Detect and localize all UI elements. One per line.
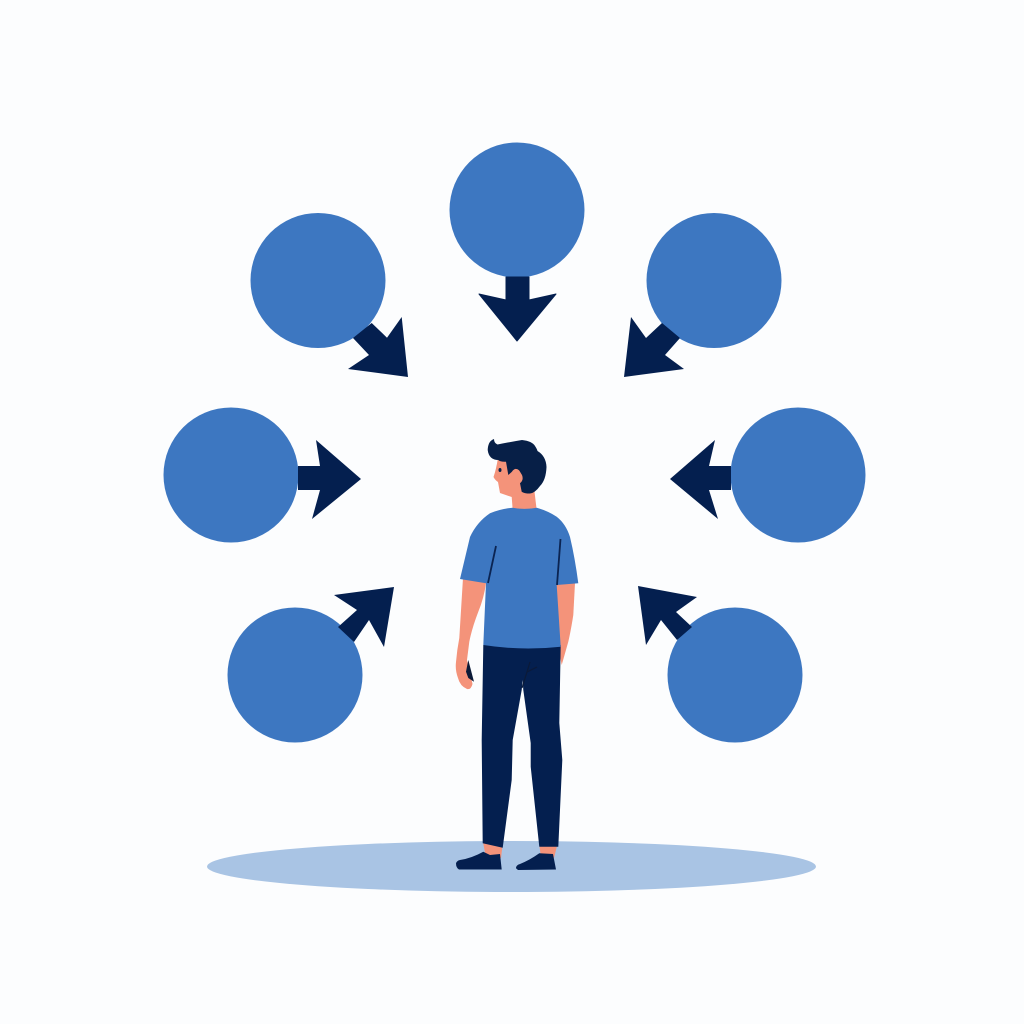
circle: top <box>450 142 584 278</box>
dark hand detail <box>466 660 474 682</box>
ground shadow ellipse <box>207 841 816 892</box>
left arm and hand <box>456 578 486 689</box>
neck and face <box>494 458 537 510</box>
t-shirt <box>460 508 578 648</box>
circle: upper left <box>250 213 386 348</box>
arrow: lower right pointing to person <box>638 586 697 645</box>
arrow: upper left pointing to person <box>348 317 408 377</box>
sleeve crease right <box>557 539 560 585</box>
left shoe <box>456 852 502 870</box>
person <box>456 439 578 870</box>
circle: upper right <box>646 213 782 348</box>
arrow: middle right pointing left <box>670 440 731 519</box>
eye <box>498 468 502 472</box>
sleeve crease left <box>488 546 496 583</box>
arrow: top pointing down <box>479 277 556 341</box>
circle: lower right <box>668 608 802 742</box>
arrow: lower left pointing to person <box>334 587 394 647</box>
right shoe <box>516 853 556 870</box>
circle: middle right <box>730 408 866 542</box>
ear <box>511 469 521 483</box>
circle: lower left <box>228 608 362 742</box>
right arm <box>556 583 575 665</box>
skin: ankles <box>483 842 558 858</box>
trouser seam <box>522 662 537 688</box>
hair <box>488 439 546 494</box>
arrow: upper right pointing to person <box>624 317 684 377</box>
arrow: middle left pointing right <box>298 440 361 519</box>
trousers <box>482 645 562 848</box>
circle: middle left <box>164 408 298 542</box>
